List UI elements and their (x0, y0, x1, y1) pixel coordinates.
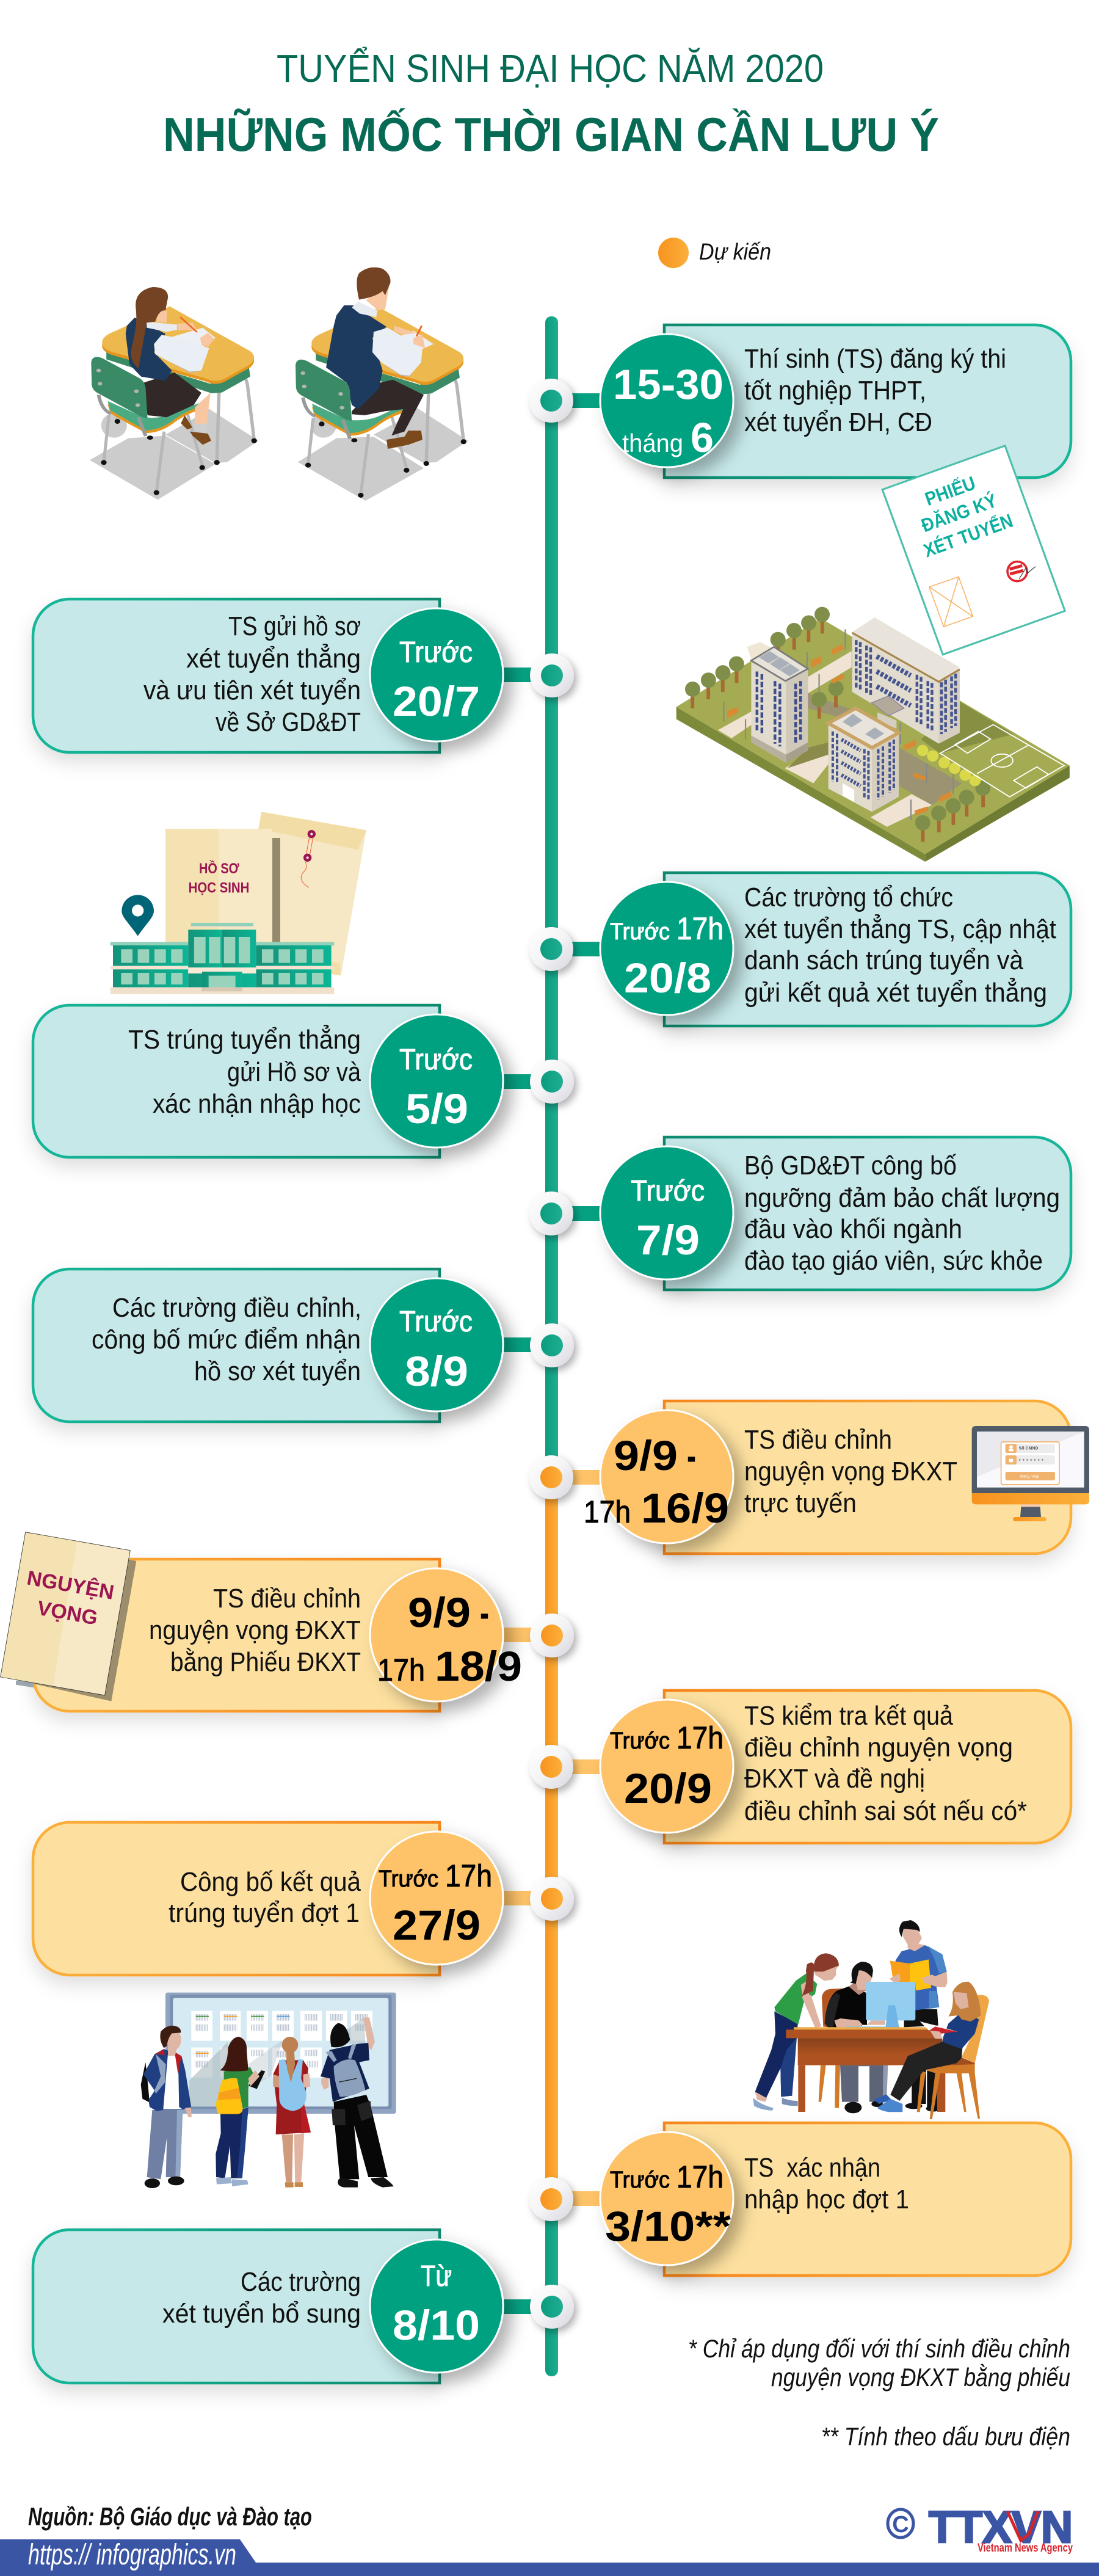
panel: card 4 (33, 1005, 574, 1157)
date badge (370, 1568, 522, 1701)
date badge: Trước (399, 1306, 473, 1338)
date badge (600, 882, 733, 1015)
title (163, 46, 939, 161)
lamp posts (724, 629, 953, 820)
date badge: 15-30 (613, 361, 724, 408)
connector and node (495, 653, 574, 697)
description (744, 1425, 957, 1518)
description: TS trúng tuyển thẳng (128, 1024, 361, 1055)
description: Các trường điều chỉnh, (112, 1293, 361, 1323)
icon: aspirations booklet: NGUYỆN (25, 1566, 116, 1604)
date badge: 8/9 (405, 1348, 468, 1395)
date badge: Trước (379, 1866, 438, 1892)
panel: card 11 (529, 2123, 1071, 2276)
panel: card 6 (33, 1269, 574, 1422)
woman leaning (753, 1953, 839, 2111)
card background (664, 1690, 1071, 1843)
description: trúng tuyển đợt 1 (169, 1898, 360, 1928)
description: trực tuyến (744, 1488, 857, 1518)
card background (33, 599, 440, 752)
table (786, 2027, 945, 2112)
description: Các trường tổ chức (744, 882, 953, 912)
description: Thí sinh (TS) đăng ký thi (744, 344, 1006, 374)
date badge (600, 2132, 733, 2265)
panel: card 12 (33, 2230, 574, 2383)
description (128, 1024, 361, 1119)
description: TS điều chỉnh (213, 1584, 361, 1614)
panel: card 1 (529, 325, 1071, 478)
seated woman (874, 1982, 989, 2119)
description: điều chỉnh sai sót nếu có* (744, 1796, 1027, 1826)
illustration: students at desks (90, 267, 468, 501)
description: gửi Hồ sơ và (227, 1057, 361, 1087)
date badge (370, 1832, 503, 1965)
form title: XÉT TUYỂN (921, 510, 1015, 561)
description (162, 2267, 361, 2329)
description: Bộ GD&ĐT công bố (744, 1151, 957, 1181)
description: Các trường (241, 2267, 361, 2297)
date badge: 7/9 (636, 1217, 700, 1264)
standing man (890, 1920, 948, 2112)
connector and node (529, 1192, 611, 1235)
panel: card 10 (33, 1822, 574, 1975)
date badge (600, 1700, 733, 1833)
connector and node (495, 1323, 574, 1367)
panel: card 5 (529, 1137, 1071, 1290)
description: nhập học đợt 1 (744, 2185, 909, 2214)
description: hồ sơ xét tuyển (194, 1356, 361, 1386)
date badge (370, 2239, 503, 2373)
description: ngưỡng đảm bảo chất lượng (744, 1183, 1060, 1213)
girl student (91, 287, 257, 495)
date badge: 9/9 (408, 1589, 471, 1636)
date badge: 17h (445, 1858, 492, 1893)
illustration: university campus (676, 607, 1070, 862)
date badge: 17h (676, 911, 724, 946)
date badge: - (480, 1589, 489, 1636)
date badge: Trước (399, 636, 473, 669)
student 3 (273, 2037, 311, 2188)
benches (727, 644, 952, 815)
form title: PHIẾU (922, 472, 978, 510)
card background (664, 1401, 1071, 1554)
footnotes (688, 2334, 1070, 2451)
connector and node (495, 1614, 574, 1657)
description: công bố mức điểm nhận (92, 1325, 361, 1355)
description (744, 344, 1006, 437)
source line: Nguồn: Bộ Giáo dục và Đào tạo (28, 2502, 312, 2531)
stamp (1006, 561, 1036, 582)
folder: HỒ SƠ (199, 860, 239, 877)
card background (33, 1822, 440, 1975)
description: nguyện vọng ĐKXT (149, 1615, 361, 1645)
boy student (296, 267, 466, 498)
date badge (600, 334, 733, 467)
date badge: 8/10 (393, 2302, 480, 2349)
card background (33, 1269, 440, 1422)
notice board (165, 1993, 396, 2114)
description: điều chỉnh nguyện vọng (744, 1733, 1013, 1763)
date badge: Trước (610, 2167, 670, 2193)
card background (33, 2230, 440, 2383)
date badge: 5/9 (405, 1085, 468, 1132)
description (143, 611, 361, 737)
date badge: 17h (584, 1494, 631, 1529)
date badge (370, 1014, 503, 1148)
description: xét tuyển thẳng (186, 642, 361, 674)
date badge: 20/7 (393, 678, 480, 725)
illustration: student records folder and school (111, 812, 366, 994)
computer monitor (846, 1982, 915, 2029)
connector and node (529, 379, 611, 423)
connector and node (529, 1745, 611, 1789)
date badge: Trước (399, 1044, 473, 1076)
description (744, 1151, 1060, 1276)
description: TS điều chỉnh (744, 1425, 892, 1455)
card background (664, 325, 1071, 478)
description (744, 1701, 1027, 1826)
date badge: 17h (377, 1653, 425, 1687)
building: long block (852, 617, 960, 744)
description: Công bố kết quả (180, 1867, 361, 1897)
description: danh sách trúng tuyển và (744, 945, 1023, 975)
card background (664, 2123, 1071, 2276)
student 2 (216, 2037, 265, 2186)
school building (111, 923, 334, 994)
connector and node (495, 2285, 574, 2329)
description: đầu vào khối ngành (744, 1214, 962, 1244)
form title (918, 472, 1015, 561)
footer band with website (0, 2539, 1099, 2576)
date badge (370, 1278, 503, 1411)
icon: computer login screen (972, 1426, 1089, 1521)
description: bằng Phiếu ĐKXT (170, 1647, 361, 1677)
building: tall tower (747, 642, 808, 763)
panel: card 7 (529, 1401, 1089, 1554)
description: xét tuyển bổ sung (162, 2299, 361, 2329)
date badge: 20/8 (624, 955, 711, 1002)
date badge: 20/9 (624, 1765, 712, 1812)
building: front block (829, 708, 899, 812)
description (744, 882, 1056, 1008)
date badge (370, 608, 503, 741)
description: gửi kết quả xét tuyển thẳng (744, 977, 1047, 1008)
illustration: registration form (882, 446, 1065, 655)
card background (664, 873, 1071, 1026)
photo box (929, 577, 973, 627)
description: đào tạo giáo viên, sức khỏe (744, 1246, 1043, 1276)
connector and node (495, 1877, 574, 1921)
description: TS gửi hồ sơ (228, 611, 361, 641)
student 4 (321, 2017, 394, 2188)
card background (33, 1559, 440, 1711)
description: ĐKXT và đề nghị (744, 1764, 925, 1794)
description: tốt nghiệp THPT, (744, 376, 926, 406)
title line 2: NHỮNG MỐC THỜI GIAN CẦN LƯU Ý (163, 107, 939, 161)
date badge: Từ (421, 2260, 452, 2293)
logo: TTXVN: Vietnam News Agency (977, 2542, 1073, 2555)
description (92, 1293, 361, 1386)
date badge: Trước (631, 1175, 705, 1207)
icon: aspirations booklet: VỌNG (35, 1597, 100, 1630)
card background (33, 1005, 440, 1157)
date badge: 18/9 (435, 1643, 522, 1690)
logo: TTXVN: TTXVN (929, 2503, 1073, 2552)
legend dot (658, 238, 689, 268)
icon: computer login screen: Đăng nhập (1020, 1475, 1040, 1479)
connector and node (529, 927, 611, 971)
connector and node (495, 1060, 574, 1104)
folder: HỌC SINH (189, 880, 249, 897)
date badge (600, 1146, 733, 1279)
panel: card 3 (529, 873, 1071, 1026)
panel: card 2 (33, 599, 574, 752)
student 1 (141, 2026, 192, 2188)
icon: aspirations booklet (1, 1532, 136, 1701)
panel: card 9 (529, 1690, 1071, 1843)
description: TS kiểm tra kết quả (744, 1701, 953, 1731)
date badge: 9/9 (614, 1432, 678, 1479)
date badge: Trước (610, 1728, 670, 1754)
logo: TTXVN: C (892, 2512, 909, 2538)
card background (664, 1137, 1071, 1290)
description: xét tuyển ĐH, CĐ (744, 407, 932, 437)
date badge: 16/9 (641, 1485, 729, 1532)
description: xét tuyển thẳng TS, cập nhật (744, 913, 1056, 944)
date badge: tháng (622, 429, 683, 457)
date badge: Trước (610, 919, 670, 945)
description: nguyện vọng ĐKXT (744, 1457, 957, 1486)
description: về Sở GD&ĐT (216, 707, 361, 737)
icon: location pin (122, 895, 154, 936)
date badge: 17h (676, 1720, 724, 1755)
description (169, 1867, 361, 1928)
illustration: students reading notice board (141, 1993, 396, 2188)
description: TS xác nhận (744, 2153, 880, 2183)
title line 1: TUYỂN SINH ĐẠI HỌC NĂM 2020 (277, 46, 824, 90)
description: xác nhận nhập học (153, 1089, 361, 1119)
date badge: - (687, 1432, 696, 1479)
illustration: students working together at a table (753, 1920, 989, 2119)
date badge: 27/9 (393, 1902, 481, 1949)
connector and node (529, 2177, 611, 2221)
description (149, 1584, 361, 1677)
seated man (819, 1962, 888, 2113)
description (744, 2153, 909, 2214)
envelope (258, 812, 366, 975)
football field (940, 724, 1064, 797)
legend label: Dự kiến (699, 239, 771, 265)
panel: card 8 (1, 1532, 574, 1711)
connector and node (529, 1455, 611, 1499)
trees (685, 607, 990, 842)
icon: computer login screen: * * * * * * * (1019, 1458, 1044, 1463)
date badge: 6 (691, 414, 714, 461)
date badge (584, 1410, 733, 1543)
form title: ĐĂNG KÝ (918, 490, 999, 536)
date badge: 3/10** (605, 2203, 731, 2250)
timeline spine (545, 316, 558, 2376)
footer band with website: https:// infographics.vn (28, 2539, 236, 2571)
legend (658, 238, 771, 268)
folder (165, 829, 280, 943)
icon: computer login screen: Số CMND (1019, 1446, 1038, 1451)
date badge: 17h (676, 2159, 724, 2194)
description: và ưu tiên xét tuyển (143, 675, 361, 705)
ground platform (676, 618, 1070, 862)
